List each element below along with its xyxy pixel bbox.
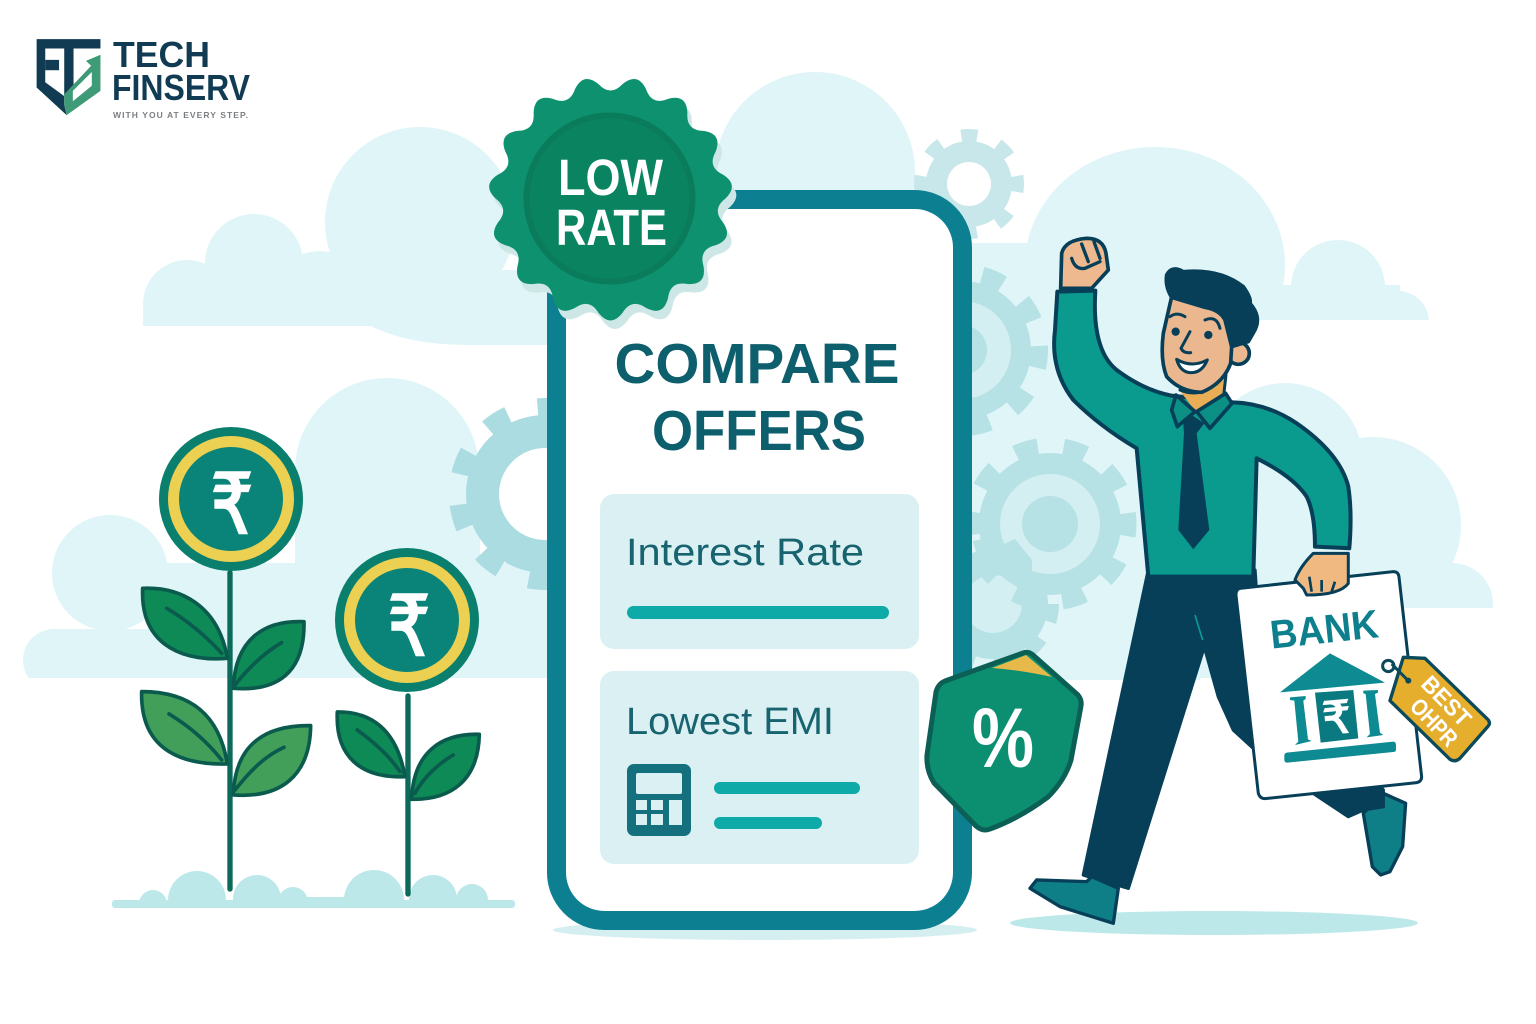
card: interest rate: Interest Rate (626, 532, 864, 574)
face (1162, 297, 1233, 392)
phone frame (556, 200, 962, 920)
neck (1179, 375, 1224, 411)
coin: small (335, 548, 479, 692)
plants with rupee coins (112, 427, 515, 930)
phone panel (556, 200, 962, 920)
heading: compare offers: OFFERS (652, 399, 866, 463)
person: businessman (1030, 238, 1406, 923)
card: lowest emi (600, 671, 919, 864)
heading: compare offers (614, 332, 900, 463)
icon: calculator (627, 764, 691, 836)
coin: large: ₹ (211, 458, 253, 551)
price tag: best ohpr (1383, 657, 1489, 761)
walking shadow (1010, 911, 1418, 935)
tie (1178, 415, 1209, 549)
phone shadow (553, 920, 977, 940)
hand holding bag (1295, 553, 1348, 595)
price tag: best ohpr: BEST (1416, 670, 1477, 732)
logo wordmark: WITH YOU AT EVERY STEP. (113, 110, 248, 120)
badge: low rate: RATE (556, 199, 667, 256)
background clouds (23, 72, 1493, 691)
shield: percent (927, 652, 1081, 830)
icon: bank building (1280, 653, 1396, 763)
logo wordmark: TECH (113, 34, 210, 75)
heading: compare offers: COMPARE (614, 332, 900, 396)
logo wordmark (112, 34, 250, 120)
logo wordmark: FINSERV (112, 67, 250, 108)
badge: low rate: LOW (558, 149, 664, 206)
bank bag (1236, 553, 1422, 799)
shield: percent: % (972, 691, 1034, 785)
logo (37, 34, 250, 120)
raised fist (1061, 238, 1108, 288)
legs and shoes (1030, 570, 1406, 923)
hair (1166, 269, 1257, 347)
logo icon: shield (37, 39, 100, 115)
background gears (441, 128, 1138, 663)
label: bank: BANK (1268, 602, 1381, 658)
coin: small: ₹ (388, 580, 430, 673)
card: interest rate (600, 494, 919, 649)
facial features (1170, 314, 1226, 393)
badge: low rate (489, 79, 736, 329)
coin: large (159, 427, 303, 571)
shirt (1054, 291, 1351, 577)
stems and leaves (142, 570, 479, 897)
head and arm details (1061, 238, 1257, 549)
icon: bank building: ₹ (1320, 691, 1353, 744)
collar (1172, 395, 1195, 427)
card: lowest emi: Lowest EMI (626, 701, 834, 743)
ear (1227, 342, 1249, 364)
price tag: best ohpr: OHPR (1405, 693, 1463, 752)
ground mounds (112, 870, 515, 908)
